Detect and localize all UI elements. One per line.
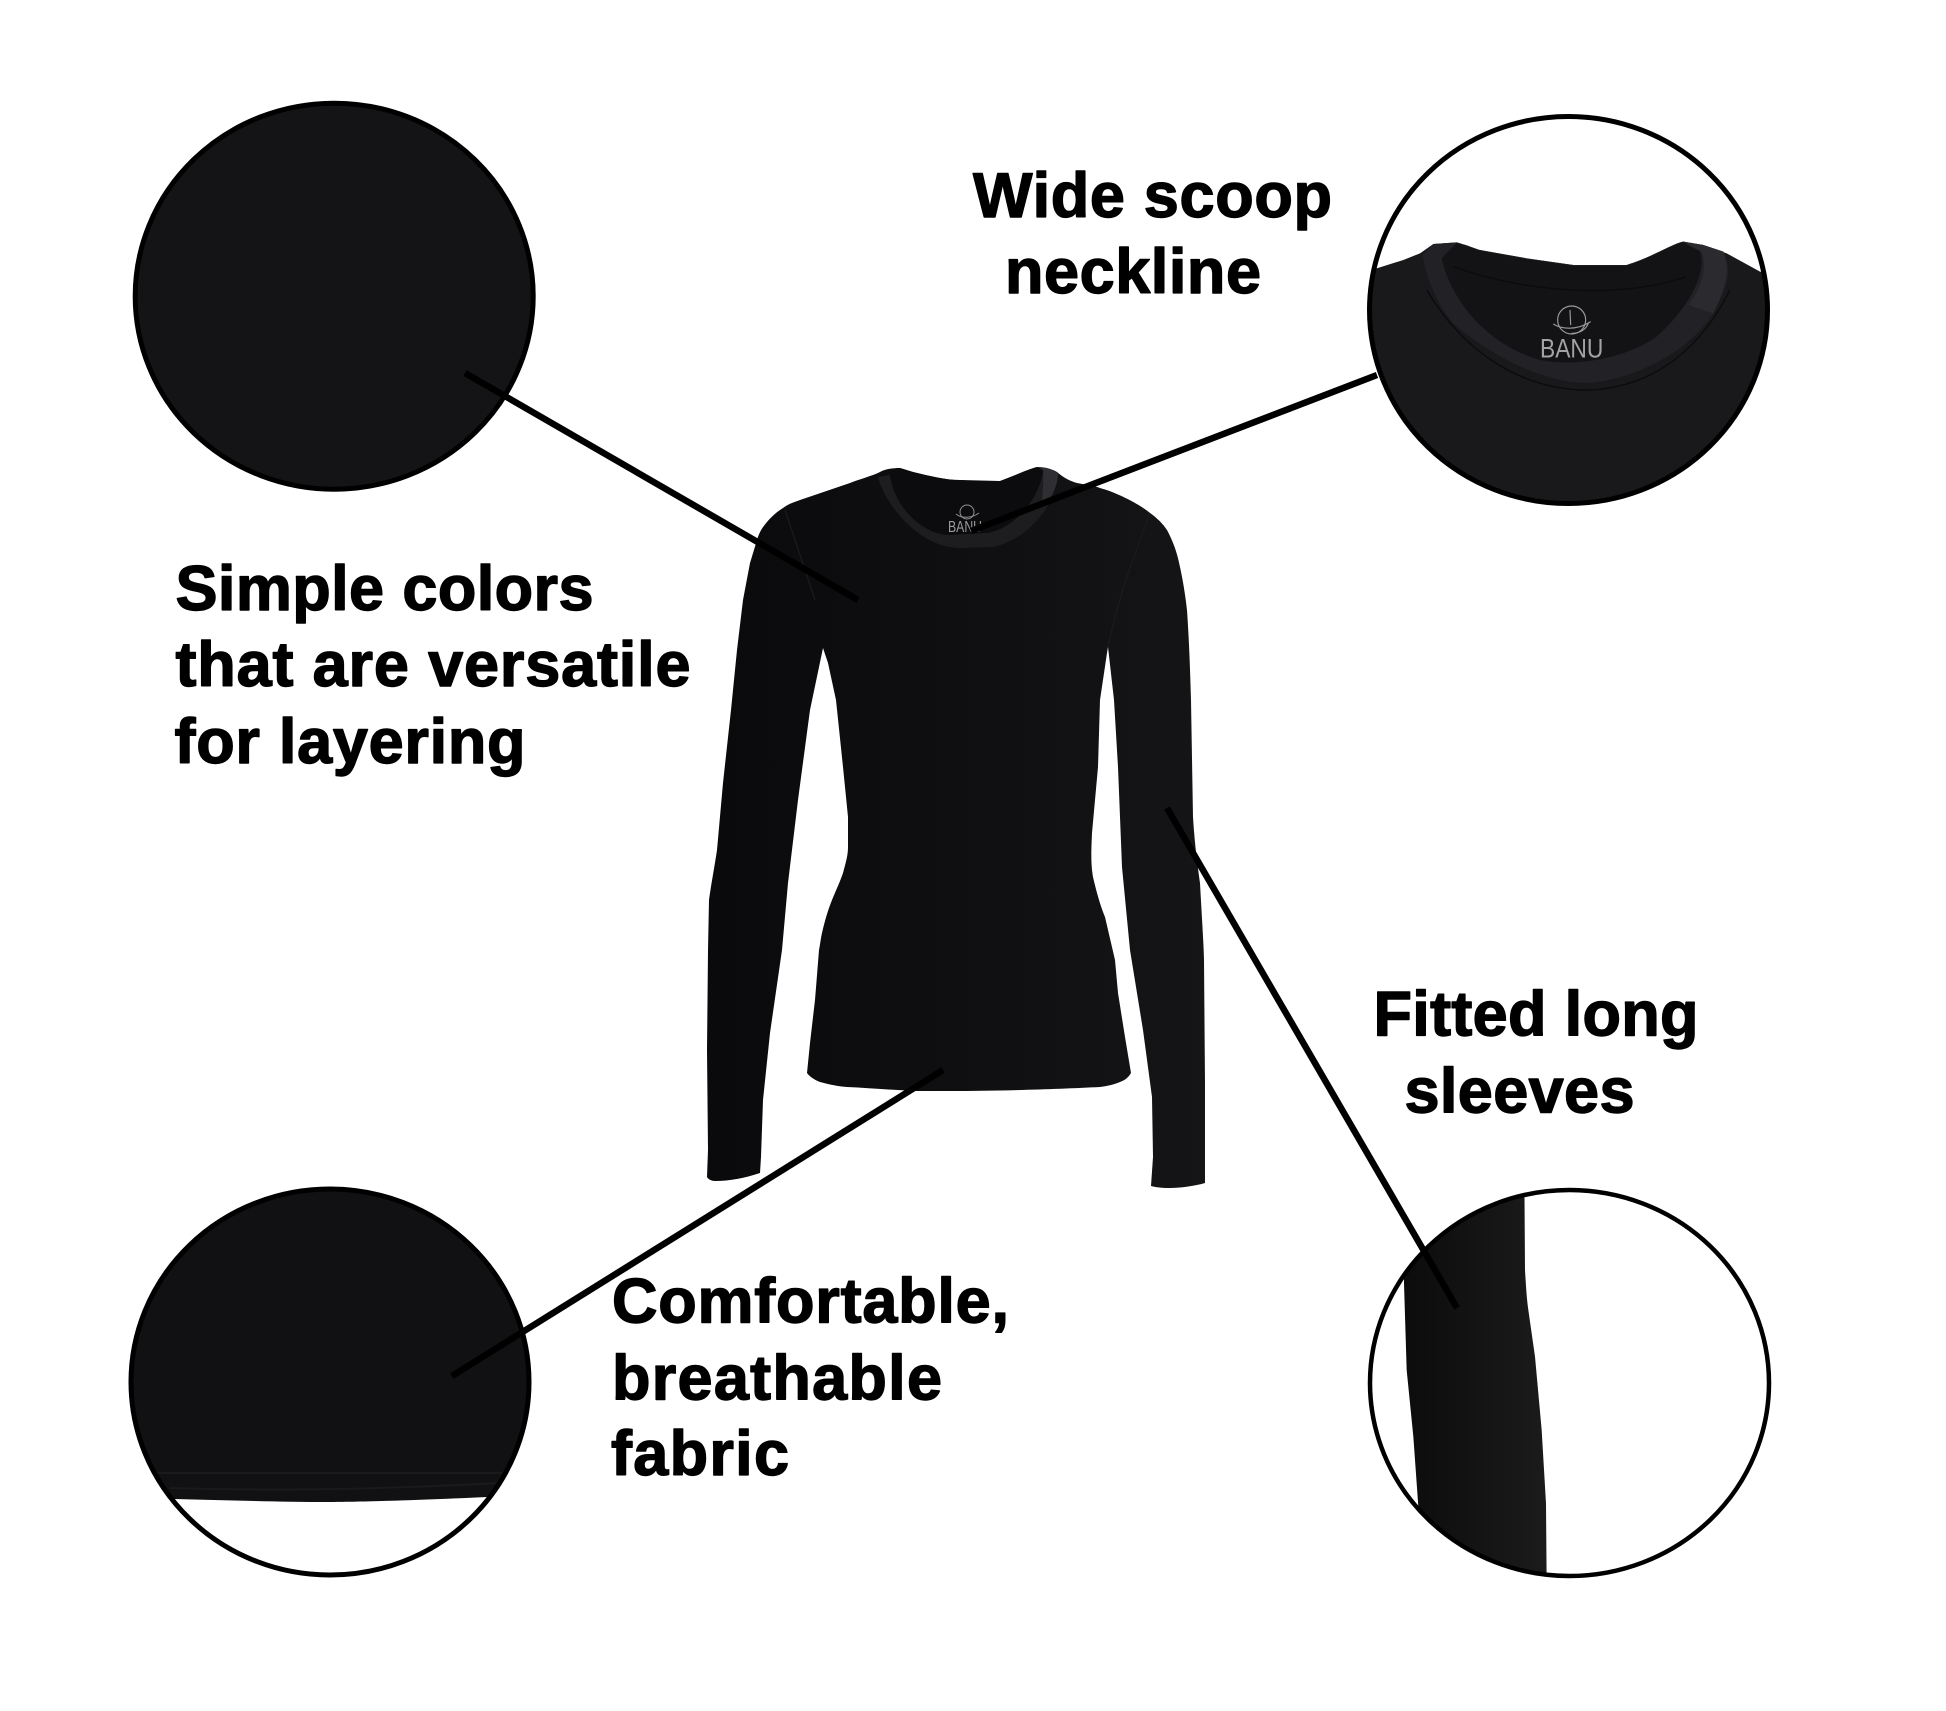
label: fabric: fabric [611, 1419, 789, 1489]
shirt neck logo [948, 505, 982, 536]
detail circle: neckline [1360, 116, 1780, 523]
neck logo word: BANU [1540, 333, 1603, 363]
detail circle: fabric colour [135, 103, 533, 489]
label: neckline: neckline [1005, 237, 1261, 307]
label: colours: for layering [174, 707, 526, 777]
label: sleeves [1374, 980, 1698, 1126]
label: sleeves: sleeves [1404, 1056, 1634, 1126]
detail circle: sleeve [1370, 1170, 1769, 1583]
neckline crop [1372, 242, 1765, 501]
leader line: hem [452, 1070, 943, 1376]
label: colours [174, 554, 690, 777]
shirt illustration [707, 467, 1205, 1188]
label: fabric: Comfortable, [612, 1266, 1009, 1336]
label: sleeves: Fitted long [1374, 980, 1698, 1050]
label: colours: Simple colors [176, 554, 594, 624]
label: neckline: Wide scoop [973, 161, 1332, 231]
leader line: fabric colour [465, 373, 858, 600]
label: colours: that are versatile [176, 630, 690, 700]
shirt neck logo: BANU [948, 519, 982, 536]
leader line: sleeve [1167, 808, 1457, 1308]
label: neckline [973, 161, 1332, 307]
label: fabric: breathable [612, 1344, 942, 1414]
neck logo mark [1553, 306, 1591, 334]
label: fabric [611, 1266, 1009, 1489]
detail circle: hem [120, 1180, 545, 1575]
leader line: neckline [971, 375, 1377, 531]
